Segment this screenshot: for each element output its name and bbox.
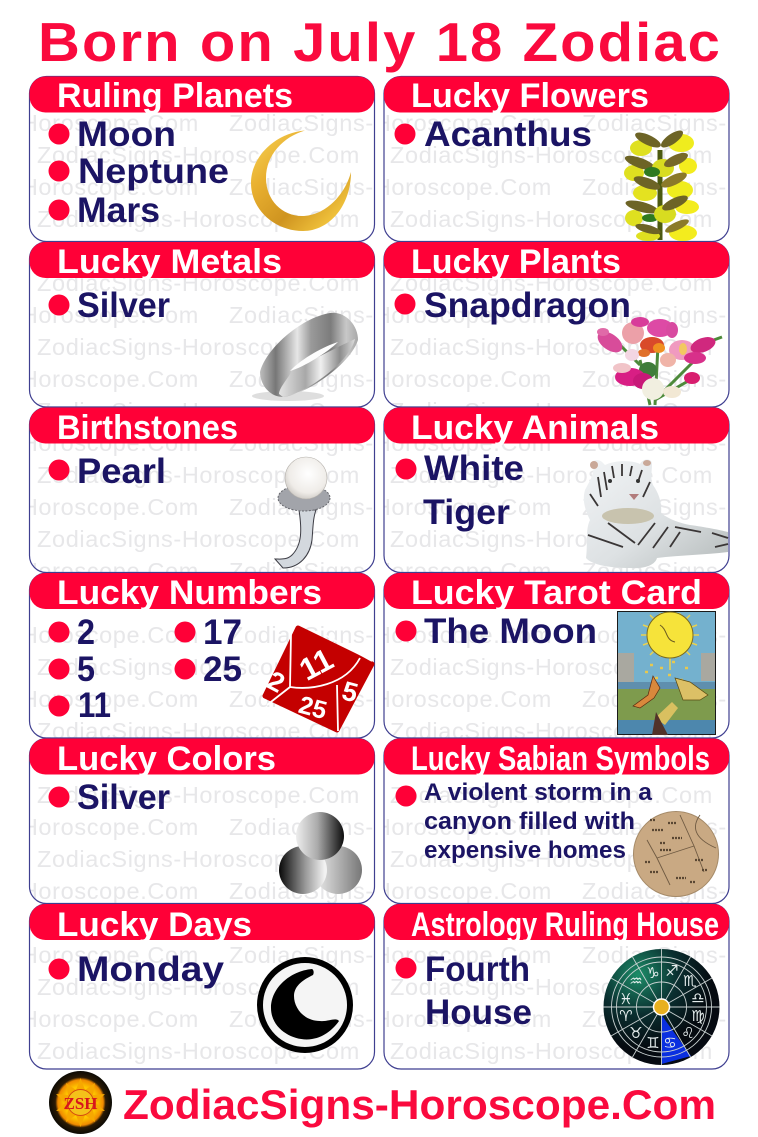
list: flowers: Acanthus <box>424 115 592 154</box>
panel: lucky flowers <box>384 76 729 242</box>
text: ZodiacSigns-Horoscope.Com <box>390 206 713 232</box>
heading: lucky tarot card: Lucky Tarot Card <box>411 574 702 612</box>
text: ZodiacSigns-Horoscope.Com <box>37 846 360 872</box>
icon: moon tarot card <box>618 612 716 735</box>
text: ZodiacSigns-Horoscope.Com <box>37 270 360 296</box>
text: sabian symbol <box>396 779 652 864</box>
text: ZodiacSigns-Horoscope.Com <box>229 174 552 200</box>
text: sabian symbol: A violent storm in a <box>424 779 652 806</box>
icon: acanthus flower <box>623 127 699 241</box>
icon: snapdragon bouquet <box>594 317 722 405</box>
list: days: Monday <box>77 950 225 989</box>
text: ZodiacSigns-Horoscope.Com <box>229 494 552 520</box>
text: sabian symbol: expensive homes <box>424 837 626 864</box>
text: ZodiacSigns-Horoscope.Com <box>229 878 552 904</box>
text: ZodiacSigns-Horoscope.Com <box>229 686 552 712</box>
text: ZodiacSigns-Horoscope.Com <box>229 942 552 968</box>
icon: red polyhedral die: 11 <box>294 641 339 688</box>
icon: site logo: ZSH <box>63 1094 98 1113</box>
panel: lucky tarot card <box>384 573 729 738</box>
list: metals: Silver <box>77 286 170 325</box>
icon: zodiac wheel: ♊︎ <box>646 1034 660 1052</box>
icon: zodiac wheel: ♓︎ <box>619 990 633 1008</box>
text: ZodiacSigns-Horoscope.Com <box>229 558 552 584</box>
text: ZodiacSigns-Horoscope.Com <box>390 270 713 296</box>
icon: site logo <box>49 1071 112 1134</box>
list: planets: Mars <box>77 191 160 230</box>
panel: lucky sabian symbols <box>384 738 729 904</box>
text: ZodiacSigns-Horoscope.Com <box>37 654 360 680</box>
icon: red polyhedral die: 5 <box>339 676 361 708</box>
list: numbers: 17 <box>203 613 242 652</box>
heading: lucky animals: Lucky Animals <box>411 409 659 447</box>
list: numbers: 5 <box>77 650 95 689</box>
list: animals: Tiger <box>423 493 510 532</box>
icon: zodiac wheel: ♈︎ <box>619 1007 633 1025</box>
icon: zodiac wheel <box>604 949 720 1065</box>
list: numbers: 25 <box>203 650 242 689</box>
icon: golden crescent moon <box>251 130 351 231</box>
text: ZodiacSigns-Horoscope.Com <box>390 718 713 744</box>
list: numbers: 2 <box>77 613 95 652</box>
icon: white tiger <box>584 460 728 568</box>
icon: zodiac wheel: ♌︎ <box>681 1024 695 1042</box>
list: numbers: 11 <box>78 686 111 725</box>
text: ZodiacSigns-Horoscope.Com <box>37 334 360 360</box>
footer website text: ZodiacSigns-Horoscope.Com <box>123 1081 716 1128</box>
text: ZodiacSigns-Horoscope.Com <box>37 462 360 488</box>
panel: birthstones <box>30 408 374 572</box>
text: ZodiacSigns-Horoscope.Com <box>390 782 713 808</box>
list: tarot: The Moon <box>424 612 597 651</box>
icon: zodiac wheel: ♉︎ <box>629 1024 643 1042</box>
icon: red polyhedral die <box>262 628 372 731</box>
icon: astrological chart <box>634 812 718 896</box>
panel: ruling planets <box>30 76 374 242</box>
list: colors: Silver <box>77 778 170 817</box>
heading: lucky colors: Lucky Colors <box>57 740 276 778</box>
text: ZodiacSigns-Horoscope.Com <box>390 334 713 360</box>
text: ZodiacSigns-Horoscope.Com <box>390 526 713 552</box>
panel: astrology ruling house <box>384 904 729 1069</box>
text: ZodiacSigns-Horoscope.Com <box>37 398 360 424</box>
text: ZodiacSigns-Horoscope.Com <box>229 110 552 136</box>
icon: red polyhedral die: 2 <box>262 665 290 699</box>
text: ZodiacSigns-Horoscope.Com <box>229 622 552 648</box>
icon: zodiac wheel: ♋︎ <box>663 1034 677 1052</box>
text: ZodiacSigns-Horoscope.Com <box>390 1038 713 1064</box>
text: ZodiacSigns-Horoscope.Com <box>37 526 360 552</box>
list: ruling house <box>396 950 532 1032</box>
list: ruling house: House <box>425 993 532 1032</box>
list: planets <box>48 115 229 230</box>
icon: red polyhedral die: 25 <box>296 691 330 725</box>
heading: ruling planets: Ruling Planets <box>57 77 293 115</box>
list: ruling house: Fourth <box>425 950 530 989</box>
text: ZodiacSigns-Horoscope.Com <box>390 654 713 680</box>
text: ZodiacSigns-Horoscope.Com <box>37 974 360 1000</box>
heading: lucky metals: Lucky Metals <box>57 243 282 281</box>
text: ZodiacSigns-Horoscope.Com <box>229 814 552 840</box>
panel: lucky days <box>30 904 374 1069</box>
list: birthstones: Pearl <box>77 452 166 491</box>
icon: zodiac wheel: ♏︎ <box>683 972 697 990</box>
icon: pearl ring <box>275 457 330 568</box>
title: Born on July 18 Zodiac <box>38 11 722 73</box>
text: ZodiacSigns-Horoscope.Com <box>37 142 360 168</box>
text: ZodiacSigns-Horoscope.Com <box>37 1038 360 1064</box>
text: ZodiacSigns-Horoscope.Com <box>390 462 713 488</box>
heading: birthstones: Birthstones <box>57 409 238 447</box>
text: ZodiacSigns-Horoscope.Com <box>229 1006 552 1032</box>
panel: lucky plants <box>384 242 729 407</box>
icon: zodiac wheel: ♒︎ <box>629 972 643 990</box>
list: numbers <box>48 613 242 725</box>
text: ZodiacSigns-Horoscope.Com <box>37 782 360 808</box>
text: ZodiacSigns-Horoscope.Com <box>390 974 713 1000</box>
panel: lucky metals <box>30 242 374 407</box>
icon: zodiac wheel: ♎︎ <box>691 989 705 1007</box>
list: planets: Neptune <box>78 152 229 191</box>
panel: lucky animals <box>384 408 729 572</box>
list: planets: Moon <box>77 115 176 154</box>
icon: silver spheres <box>279 812 362 894</box>
text: ZodiacSigns-Horoscope.Com <box>37 718 360 744</box>
icon: zodiac wheel: ♍︎ <box>691 1007 705 1025</box>
text: ZodiacSigns-Horoscope.Com <box>37 206 360 232</box>
heading: lucky numbers: Lucky Numbers <box>57 574 322 612</box>
panel: lucky numbers <box>30 573 374 738</box>
text: ZodiacSigns-Horoscope.Com <box>229 430 552 456</box>
list: plants: Snapdragon <box>424 286 631 325</box>
text: ZodiacSigns-Horoscope.Com <box>229 302 552 328</box>
heading: lucky days: Lucky Days <box>57 906 252 944</box>
text: ZodiacSigns-Horoscope.Com <box>229 366 552 392</box>
list: animals <box>396 449 524 532</box>
text: ZodiacSigns-Horoscope.Com <box>390 398 713 424</box>
icon: silver ring <box>252 313 358 401</box>
heading: lucky flowers: Lucky Flowers <box>411 77 649 115</box>
heading: lucky plants: Lucky Plants <box>411 243 621 281</box>
text: sabian symbol: canyon filled with <box>424 808 635 835</box>
text: ZodiacSigns-Horoscope.Com <box>390 846 713 872</box>
icon: zodiac wheel: ♑︎ <box>646 964 660 982</box>
icon: monday moon symbol <box>260 960 350 1050</box>
list: animals: White <box>424 449 524 488</box>
text: ZodiacSigns-Horoscope.Com <box>390 142 713 168</box>
panel: lucky colors <box>30 738 374 904</box>
icon: zodiac wheel: ♐︎ <box>665 962 679 980</box>
